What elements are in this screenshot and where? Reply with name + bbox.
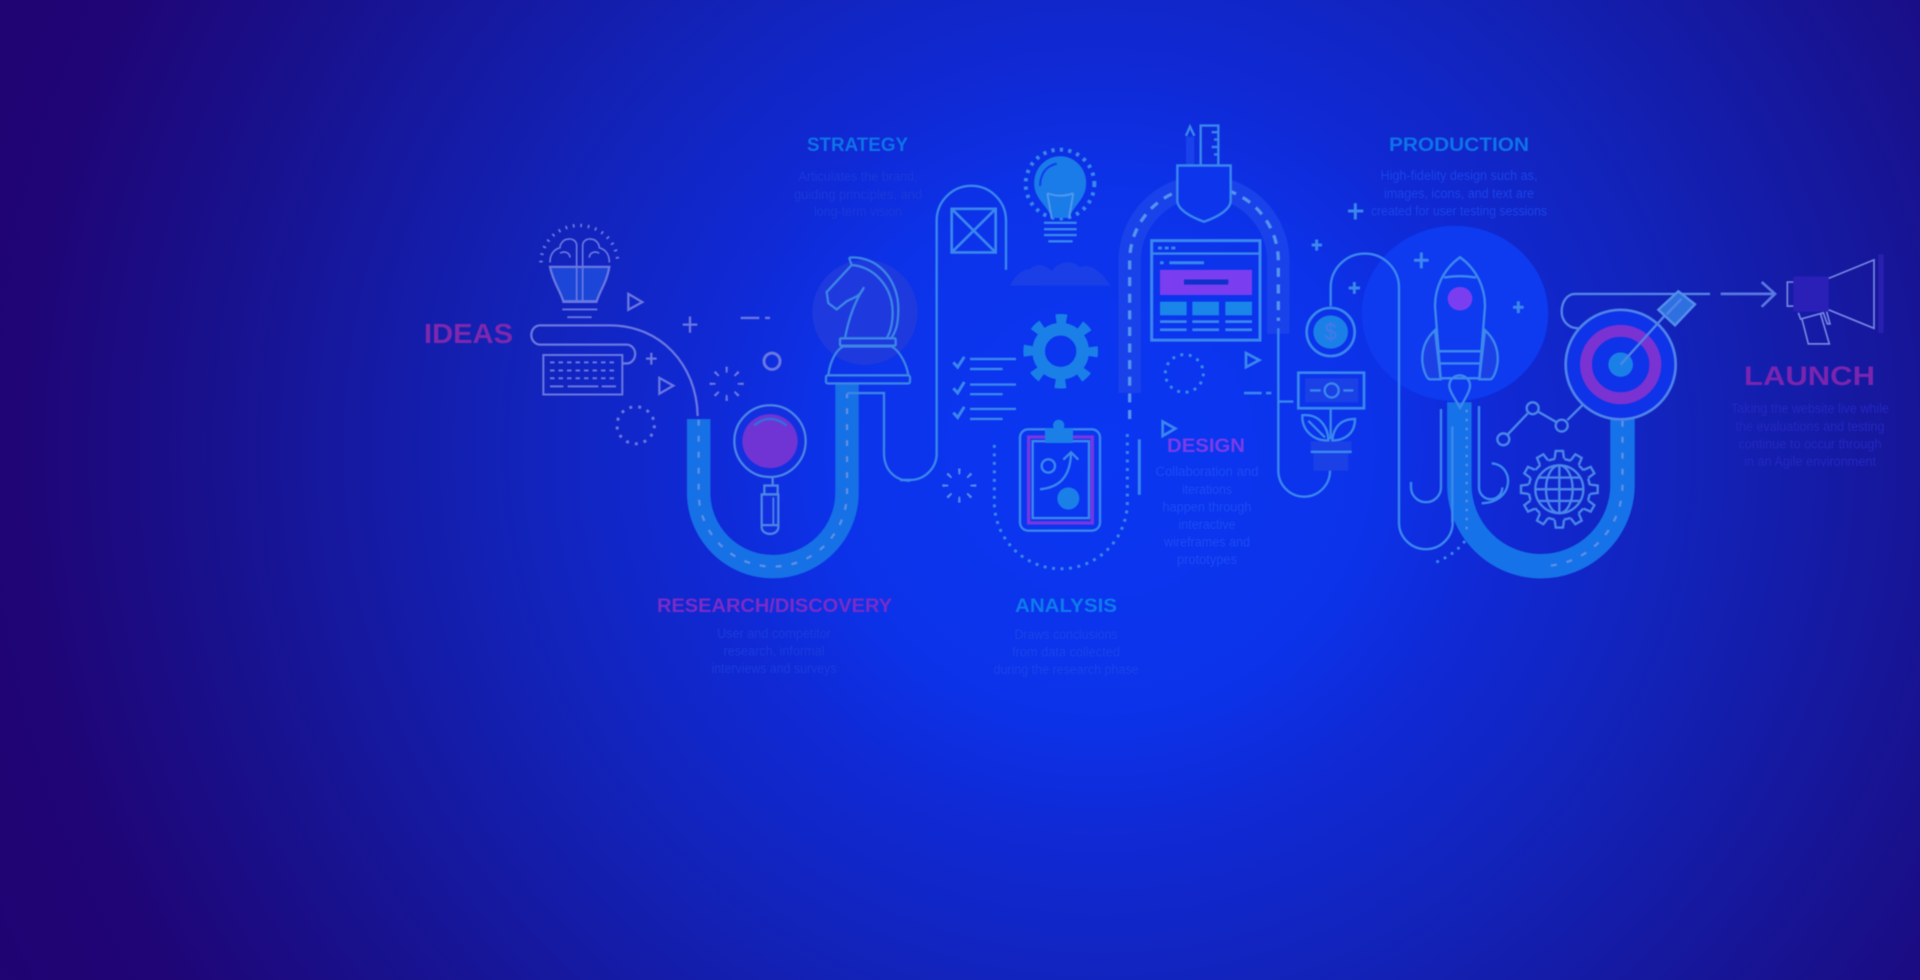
text block: strategy [794, 135, 922, 219]
text block: design: DESIGN [1167, 436, 1245, 457]
text block: production: PRODUCTION [1389, 134, 1529, 156]
icon: plus [646, 353, 657, 365]
icon: wireframe box [952, 209, 996, 252]
text block: production: created for user testing sessions [1371, 204, 1547, 218]
icon: magnifying glass [734, 405, 806, 534]
icon: clipboard [1020, 420, 1100, 531]
road: production u-curve [1433, 402, 1622, 566]
icon: plus [683, 316, 697, 333]
text block: launch [1731, 361, 1889, 469]
text block: design: interactive [1178, 517, 1236, 532]
icon: triangle marker [628, 294, 642, 310]
text block: launch: Taking the website live while [1731, 401, 1889, 416]
text block: research and discovery: User and competitor [717, 626, 831, 641]
text block: analysis [994, 595, 1138, 677]
text block: analysis: during the research phase [994, 662, 1138, 677]
text block: strategy: guiding principles, and [794, 187, 922, 202]
chart: line chart [1497, 402, 1582, 445]
icon: launch arrow [1721, 282, 1775, 307]
icon: solid gear [1028, 319, 1093, 384]
text block: strategy: STRATEGY [807, 135, 908, 156]
icon: plus [1348, 203, 1363, 220]
icon: triangle marker [1163, 422, 1175, 436]
icon: target [1566, 291, 1695, 419]
icon: plus [1312, 240, 1322, 251]
icon: plant pot [1311, 441, 1352, 471]
icon: sunburst [945, 471, 973, 500]
text block: production: images, icons, and text are [1384, 186, 1534, 201]
text block: design: wireframes and [1163, 534, 1250, 550]
panel: ideas and research section [531, 225, 918, 567]
decoration: rocket glow [1362, 226, 1548, 401]
connector: ideas tube [531, 325, 698, 416]
icon: plus [1349, 282, 1360, 294]
icon: brain light bulb [541, 225, 618, 317]
connector: coin loop [1331, 254, 1453, 549]
connector: investment path [1278, 328, 1330, 497]
text block: research and discovery: interviews and surveys [712, 661, 837, 676]
text block: launch: LAUNCH [1744, 361, 1875, 391]
text block: launch: in an Agile environment [1744, 454, 1876, 469]
decoration: cloud [1010, 262, 1111, 286]
icon: plus [1513, 301, 1524, 313]
text block: design: prototypes [1177, 552, 1237, 567]
icon: dash [1244, 392, 1271, 394]
icon: pencil and ruler in pocket [1177, 126, 1231, 222]
icon: triangle marker [1246, 353, 1259, 367]
icon: browser wireframe [1152, 241, 1260, 340]
text block: production [1371, 134, 1547, 218]
icon: rocket hooks [1411, 406, 1508, 503]
icon: dotted ring [1165, 355, 1203, 392]
icon: coin: $ [1325, 319, 1337, 345]
icon: coin [1307, 308, 1355, 356]
connector: strategy path [847, 393, 910, 481]
text block: research and discovery [657, 595, 892, 676]
icon: dash [741, 317, 770, 319]
text block: strategy: long-term vision [814, 204, 902, 219]
icon: rocket [1422, 257, 1498, 408]
text block: design [1156, 436, 1258, 567]
connector: launch line [1562, 294, 1710, 328]
icon: money note and leaves [1298, 373, 1364, 440]
text block: launch: continue to occur through [1738, 436, 1882, 452]
text block: research and discovery: research, informal [724, 644, 824, 658]
text block: analysis: ANALYSIS [1015, 595, 1117, 617]
text block: launch: the evaluations and testing [1736, 419, 1884, 434]
path: analysis dotted u-curve [994, 434, 1127, 569]
icon: megaphone [1787, 254, 1884, 344]
connector: strategy arch [900, 186, 1006, 480]
text block: research and discovery: RESEARCH/DISCOVERY [657, 595, 892, 617]
icon: triangle marker [659, 378, 673, 394]
text block: design: Collaboration and [1156, 464, 1258, 479]
icon: divider line [1138, 439, 1141, 495]
icon: globe gear [1521, 451, 1598, 528]
text block: strategy: Articulates the brand, [798, 169, 918, 184]
icon: sunburst [713, 370, 741, 398]
text block: analysis: Draws conclusions [1014, 627, 1118, 642]
text block: production: High-fidelity design such as, [1380, 168, 1538, 183]
road: design arch [1130, 187, 1278, 419]
text block: analysis: from data collected [1012, 644, 1120, 660]
icon: checklist [953, 357, 1016, 419]
panel: strategy, analysis and design section [900, 126, 1364, 569]
icon: idea bulb [1026, 150, 1094, 241]
icon: ring [764, 353, 780, 369]
text block: design: iterations [1182, 482, 1232, 497]
heading: ideas: IDEAS [424, 318, 513, 349]
icon: keyboard [543, 355, 622, 395]
road: research u-curve [699, 385, 847, 567]
icon: plus [1414, 252, 1429, 268]
text block: design: happen through [1162, 500, 1252, 514]
icon: dotted ring [617, 407, 654, 444]
panel: production and launch section [1331, 226, 1884, 566]
icon: chess knight [812, 257, 918, 383]
